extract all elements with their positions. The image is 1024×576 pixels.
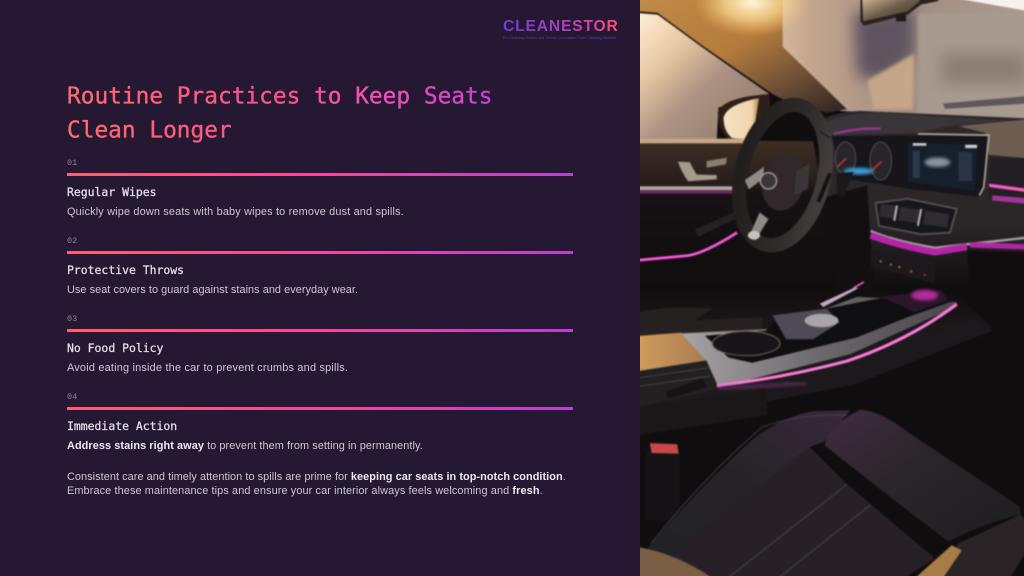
item 4 text: Address stains right away to prevent them from setting in permanently. xyxy=(67,440,423,452)
item 2 rule xyxy=(67,251,573,254)
logo tagline: Pro Cleaning Guides and Service Journalism From Cleaning Markets xyxy=(503,36,616,40)
air vents xyxy=(876,199,957,234)
seat stitching xyxy=(651,415,871,576)
item 1 rule xyxy=(67,173,573,176)
closing paragraph: Embrace these maintenance tips and ensure your car interior always feels welcoming and fresh. xyxy=(67,485,543,497)
item 2 number: 02 xyxy=(67,236,77,246)
title: Clean Longer xyxy=(67,118,232,144)
base interior xyxy=(640,0,1024,576)
steering wheel xyxy=(725,96,854,255)
title: Routine Practices to Keep Seats xyxy=(67,84,492,110)
item 4 number: 04 xyxy=(67,392,77,402)
sun glare xyxy=(695,0,810,37)
seat bolster right xyxy=(825,410,1021,542)
item 1 number: 01 xyxy=(67,158,77,168)
closing paragraph: Consistent care and timely attention to spills are prime for keeping car seats in top-notch condition. xyxy=(67,471,566,483)
photo: car interior xyxy=(640,0,1024,576)
item 4 rule xyxy=(67,407,573,410)
seat belt buckle xyxy=(646,443,680,520)
control panel xyxy=(871,250,1024,290)
closing paragraph xyxy=(67,471,566,497)
item 3 number: 03 xyxy=(67,314,77,324)
title xyxy=(67,84,492,144)
item 3 rule xyxy=(67,329,573,332)
seat center cushion xyxy=(671,447,935,576)
sunlit seat edge xyxy=(637,514,1024,576)
trim and magenta strip xyxy=(871,231,1024,252)
center console xyxy=(637,282,992,435)
instrument display xyxy=(832,134,989,197)
ambient strips right xyxy=(989,184,1024,204)
door panel xyxy=(637,139,840,290)
item 4 heading: Immediate Action xyxy=(67,419,177,433)
item 1 heading: Regular Wipes xyxy=(67,185,157,199)
seat bolster xyxy=(647,410,850,556)
item 2 text: Use seat covers to guard against stains and everyday wear. xyxy=(67,284,358,296)
A pillar xyxy=(637,0,847,113)
logo wordmark: CLEANESTOR xyxy=(503,18,619,35)
dashboard xyxy=(820,111,1024,290)
logo xyxy=(503,18,619,40)
item 2 heading: Protective Throws xyxy=(67,263,184,277)
rearview mirror xyxy=(860,0,940,26)
side window xyxy=(637,13,769,140)
item 3 text: Avoid eating inside the car to prevent crumbs and spills. xyxy=(67,362,348,374)
item 1 text: Quickly wipe down seats with baby wipes to remove dust and spills. xyxy=(67,206,404,218)
item 3 heading: No Food Policy xyxy=(67,341,163,355)
side mirror xyxy=(718,94,771,140)
windshield xyxy=(718,0,1024,121)
